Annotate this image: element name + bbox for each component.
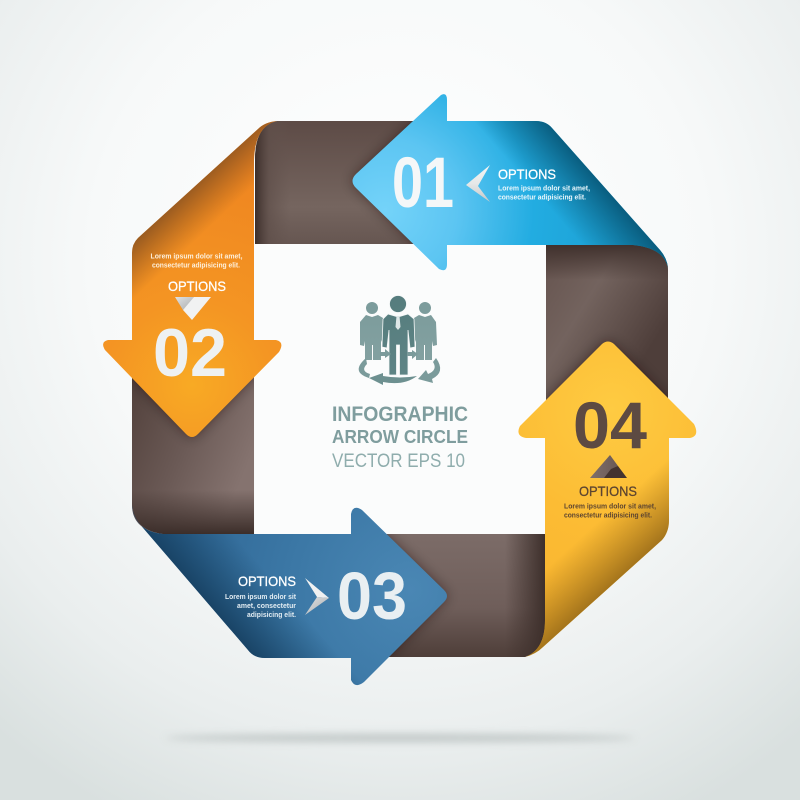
arrow 01 heading: OPTIONS [498,166,556,182]
icon: three business people with circular arrows [359,296,440,385]
title line 1: INFOGRAPHIC [332,403,468,426]
small arrow left [380,349,391,358]
floor shadow [165,734,635,742]
circular arrow right [418,358,440,383]
arrow 04 fold shading [518,342,696,657]
small arrow right [407,350,418,359]
arrow 02 heading: OPTIONS [168,278,226,294]
arrow 03 body text: Lorem ipsum dolor sit [225,594,297,601]
arrow 01 fold shading [352,94,668,270]
arrow 01 body text: Lorem ipsum dolor sit amet, [498,186,590,192]
arrow 03 chevron [305,578,329,615]
right person [414,302,437,360]
title line 2: ARROW CIRCLE [332,427,468,447]
arrow 03: navy [132,505,447,685]
arrow 02 chevron [175,297,211,320]
arrow shadows on the ribbon [132,121,668,657]
arrow 04 chevron [590,455,627,478]
arrow 02 shape [103,121,281,437]
arrow 02 body text: consectetur adipisicing elit. [152,262,240,270]
arrow 01 chevron [466,165,490,202]
arrow 02: orange [103,121,281,437]
arrow 03 number: 03 [337,559,407,634]
arrow 04 heading: OPTIONS [579,483,637,499]
arrow 03 heading: OPTIONS [238,573,296,589]
centre title [332,403,468,472]
arrow 01: blue [352,94,668,270]
title line 3: VECTOR EPS 10 [332,451,465,472]
arrow 03 fold shading [132,505,447,685]
arrow 01 number: 01 [392,144,454,223]
arrow 03 body text: adipisicing elit. [247,612,296,619]
tie [396,316,400,330]
brown ribbon bands [132,121,668,657]
arrow 02 body text: Lorem ipsum dolor sit amet, [150,254,243,260]
circular arrow bottom [369,373,417,385]
centre person [382,296,415,375]
arrow 04 number: 04 [573,388,647,462]
arrow 01 body text: consectetur adipisicing elit. [498,194,586,202]
arrow 01 shape [352,94,668,270]
arrow 04: yellow [518,342,696,657]
arrow 04 shape [518,342,696,657]
arrow 03 shape [132,505,447,685]
arrow 02 fold shading [103,121,281,437]
circular arrow left [359,358,370,378]
arrow 04 body text: Lorem ipsum dolor sit amet, [564,504,656,510]
arrow 02 number: 02 [153,315,227,391]
left person [360,302,383,360]
centre panel [255,244,546,534]
arrow 03 body text: amet, consectetur [237,603,296,610]
arrow 04 body text: consectetur adipisicing elit. [564,512,652,520]
